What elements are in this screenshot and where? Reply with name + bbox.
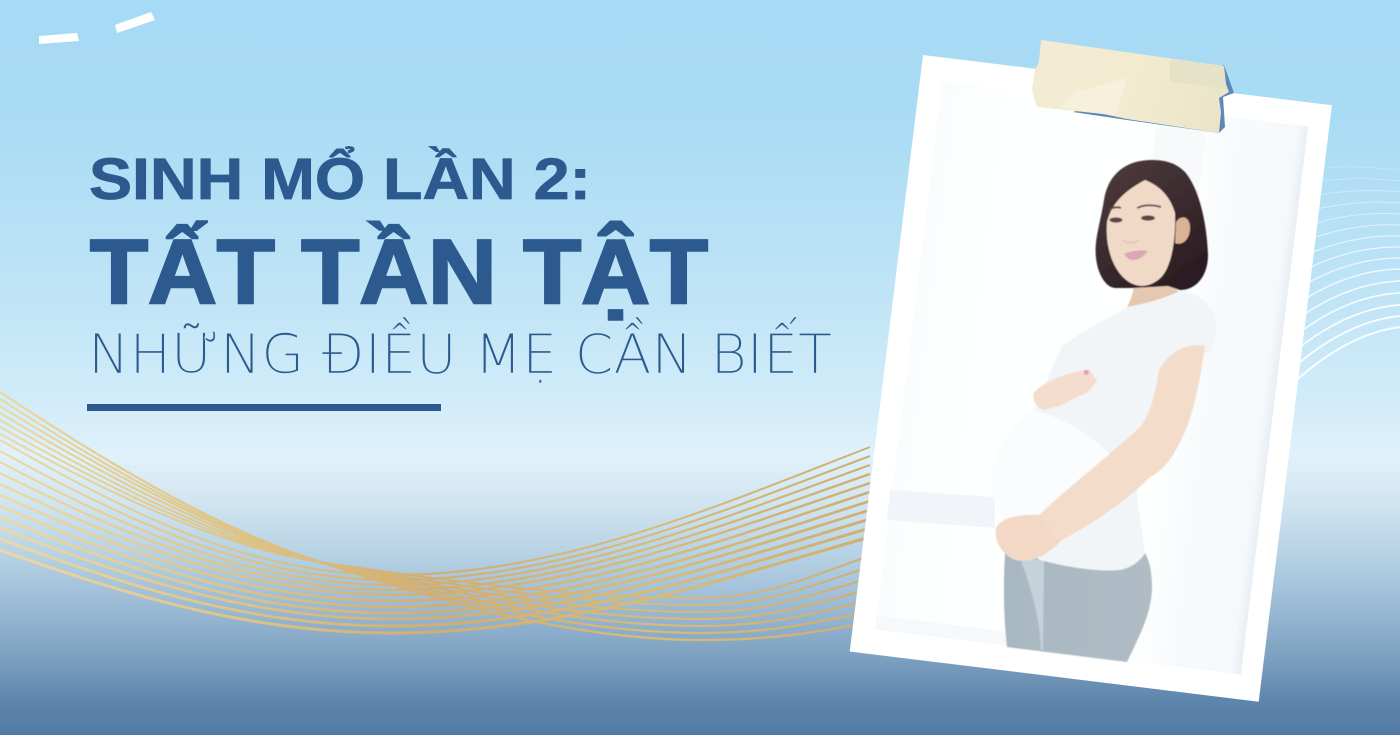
- photo card: [850, 40, 1332, 702]
- white dash decorations: [39, 12, 155, 44]
- upper hand: [1033, 370, 1097, 410]
- face: [1107, 180, 1175, 286]
- heading line 3: NHỮNG ĐIỀU MẸ CẦN BIẾT: [88, 318, 832, 386]
- tape shadow: [1073, 65, 1234, 133]
- ear: [1175, 217, 1190, 244]
- masking tape: [1032, 40, 1229, 133]
- arm: [1037, 345, 1205, 543]
- heading line 2: TẤT TẦN TẬT: [90, 221, 708, 323]
- underline rule: [87, 404, 441, 411]
- tape worn corner: [1170, 59, 1226, 88]
- gold wave ribbon: [0, 392, 870, 640]
- lower hand: [996, 515, 1060, 561]
- hair: [1096, 160, 1208, 290]
- white frame and window background: [850, 55, 1332, 702]
- eyebrows: [1108, 205, 1161, 210]
- right eye: [1141, 215, 1155, 221]
- belly highlight: [992, 410, 1120, 545]
- title block: [87, 147, 832, 411]
- neck: [1127, 270, 1178, 307]
- lips: [1124, 250, 1148, 260]
- white wave lines right: [1280, 167, 1400, 396]
- tape fold: [1060, 78, 1127, 115]
- heading line 1: SINH MỔ LẦN 2:: [89, 147, 591, 212]
- nose: [1123, 240, 1139, 243]
- window sill: [887, 490, 995, 528]
- woman: [992, 160, 1217, 662]
- left eye: [1110, 217, 1122, 223]
- shirt: [992, 291, 1217, 571]
- nail: [1084, 370, 1089, 375]
- pants: [1004, 553, 1152, 662]
- pants seam: [1020, 558, 1044, 650]
